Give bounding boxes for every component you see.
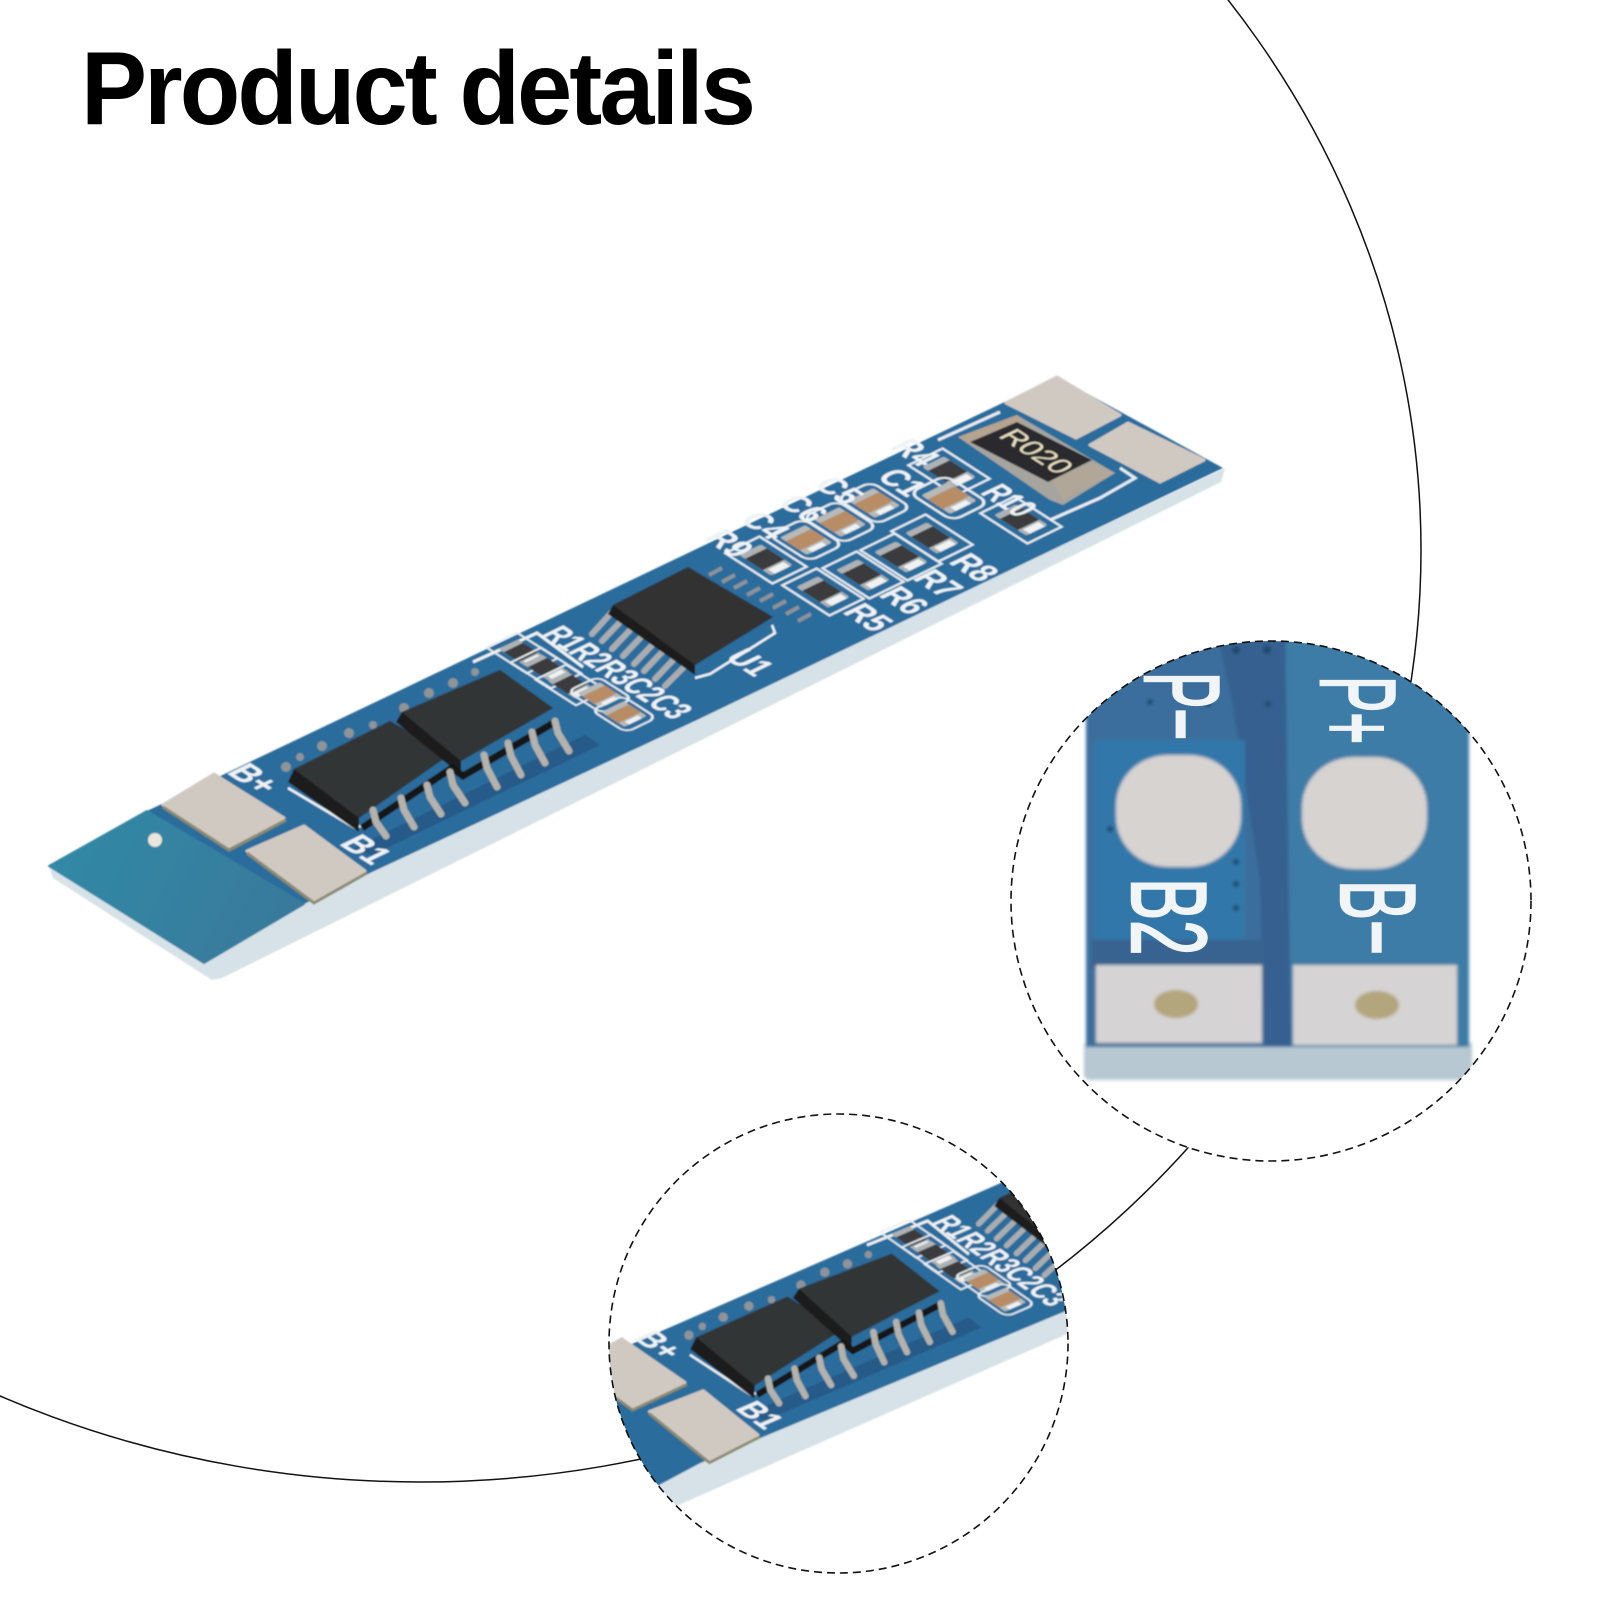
silkscreen labels: R1R2R3C2C3 — [532, 621, 701, 724]
label B2: B2 — [1109, 878, 1228, 955]
vias — [1107, 646, 1271, 911]
silkscreen labels: C1 — [868, 464, 936, 502]
circle background — [1011, 641, 1531, 1161]
main circuit board product photo — [49, 377, 1225, 980]
silkscreen labels: B+ — [626, 1326, 692, 1363]
clipped magnified board — [609, 1182, 1068, 1506]
left side components — [163, 567, 811, 903]
clipped magnified board — [1084, 620, 1472, 1080]
circle background — [609, 1114, 1068, 1573]
right hole — [1355, 991, 1399, 1019]
shunt resistor R020: R020 — [991, 425, 1080, 478]
silkscreen labels: R1R2R3C2C3 — [924, 1211, 1078, 1310]
right round pad — [1302, 757, 1427, 869]
right contact pads — [1006, 377, 1204, 482]
silkscreen labels: R6 — [870, 582, 938, 620]
left round pad — [1116, 755, 1241, 867]
shunt resistor R020 — [938, 412, 1135, 520]
small resistors — [725, 449, 1062, 615]
silkscreen labels: R10 — [972, 480, 1046, 522]
silkscreen labels: R4 — [881, 434, 949, 472]
left solder pad — [1096, 965, 1262, 1043]
inner bright panel — [1094, 740, 1245, 940]
silkscreen labels: C5 — [805, 472, 873, 510]
board blue face — [147, 377, 1223, 904]
dashed outline — [1011, 641, 1531, 1161]
silkscreen labels: B+ — [218, 759, 289, 799]
detail circle: board end with P and B terminals — [1011, 620, 1531, 1161]
silkscreen labels: B1 — [330, 830, 401, 869]
silkscreen labels: U1 — [717, 644, 783, 681]
dark center trace — [1220, 641, 1292, 1047]
teal end of board — [49, 811, 304, 963]
silkscreen labels: B1 — [727, 1396, 793, 1433]
left hole — [1154, 990, 1198, 1018]
label B-: B− — [1318, 880, 1436, 955]
silkscreen labels: C6 — [769, 490, 837, 528]
board face — [616, 1182, 1065, 1486]
silkscreen labels: R5 — [834, 599, 902, 637]
board face — [1282, 642, 1472, 1049]
label P-: P− — [1122, 672, 1242, 740]
silkscreen labels: R8 — [940, 549, 1008, 587]
board edge — [658, 1310, 1068, 1506]
silkscreen labels: C4 — [731, 507, 799, 545]
mounting hole — [148, 833, 162, 847]
label P+: P+ — [1298, 676, 1418, 744]
dashed outline — [609, 1114, 1068, 1573]
silkscreen labels — [218, 434, 1046, 869]
dark band above pads — [1092, 940, 1262, 966]
silkscreen labels — [622, 1197, 1081, 1447]
silkscreen labels: R9 — [695, 525, 763, 563]
title: Product details — [81, 31, 753, 147]
board edge — [49, 468, 1225, 980]
right solder pad — [1293, 965, 1457, 1045]
small capacitors — [769, 475, 989, 561]
silkscreen labels: R7 — [904, 565, 972, 603]
detail circle: MOSFET chips — [608, 1113, 1069, 1574]
board edge — [1084, 1040, 1472, 1080]
left darker panel — [1086, 620, 1264, 1047]
chips and pads — [609, 1118, 1064, 1528]
